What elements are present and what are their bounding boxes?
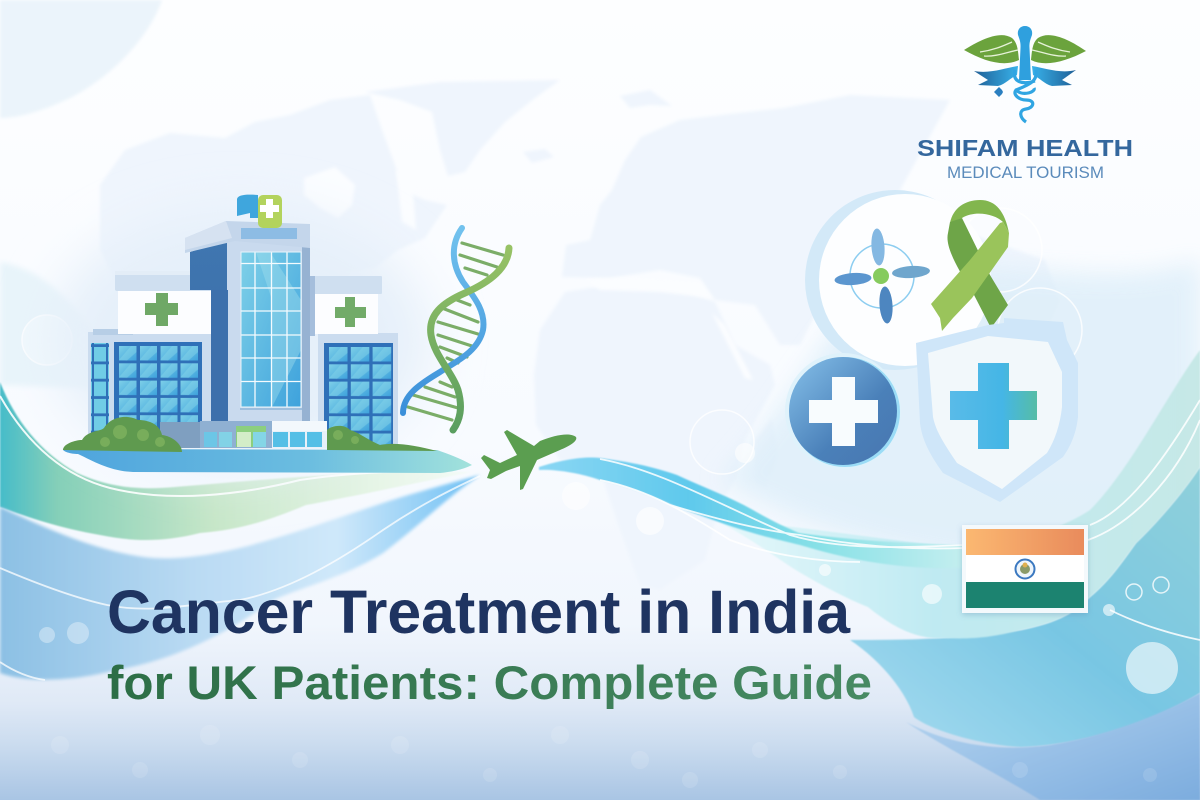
- top-left corner blob: [0, 0, 162, 118]
- white curve over green swoosh: [0, 396, 410, 496]
- saffron stripe: [966, 529, 1084, 555]
- circle emblem: [805, 190, 991, 370]
- map inland water and ocean highlights: [304, 167, 753, 380]
- small star: [994, 87, 1003, 97]
- left wing upper block: [115, 271, 212, 334]
- right wing upper block: [308, 276, 382, 336]
- right bokeh circles: [562, 443, 1178, 694]
- airplane: [481, 430, 576, 490]
- DNA helix: [403, 228, 509, 430]
- left green cross: [145, 293, 178, 326]
- decorative left circle: [22, 315, 72, 365]
- tower roof light edge: [185, 221, 232, 250]
- periwinkle wave bottom right: [906, 693, 1200, 800]
- white curves over blue swoosh: [0, 476, 480, 680]
- tower roof: [185, 221, 310, 253]
- crosshair hub: [873, 268, 889, 284]
- decorative swirl rings: [690, 208, 1169, 600]
- logo: [917, 26, 1133, 182]
- DNA rungs: [408, 243, 503, 420]
- left bushes: [63, 417, 182, 452]
- title line two: for UK Patients: Complete Guide: [107, 656, 872, 709]
- world map backdrop: [100, 80, 1060, 590]
- central tower: [190, 240, 310, 422]
- brand name: SHIFAM HEALTH: [917, 135, 1133, 161]
- pale left wave: [0, 262, 125, 390]
- hospital illustration: [50, 195, 472, 473]
- DNA green strand: [431, 248, 509, 430]
- awareness ribbon: [931, 200, 1009, 331]
- left bokeh dots: [39, 622, 89, 644]
- green swoosh: [0, 382, 472, 540]
- shield cross: [950, 363, 1037, 449]
- right blue wing: [1032, 66, 1076, 86]
- entrance lobby: [160, 421, 327, 448]
- tower glass: [241, 252, 301, 407]
- white curves on right wave: [600, 400, 1200, 640]
- left wing lower block: [88, 329, 213, 448]
- bottom bokeh dots: [51, 725, 1157, 788]
- platform: [63, 449, 472, 473]
- roof sign base: [241, 228, 297, 239]
- right green cross: [335, 297, 366, 327]
- title line one: Cancer Treatment in India: [107, 578, 851, 646]
- crosshair ring: [850, 244, 914, 308]
- shield: [916, 318, 1078, 502]
- right green wing: [1031, 35, 1086, 63]
- Ashoka chakra: [1016, 560, 1034, 578]
- deep blue wave lower right: [850, 467, 1200, 747]
- cyan wave band: [715, 350, 1200, 638]
- pale wave behind icons: [720, 260, 1200, 564]
- staff: [1018, 26, 1032, 80]
- serpent: [1014, 70, 1036, 122]
- soft glow behind hospital: [50, 210, 430, 470]
- medical plus badge: [785, 353, 901, 469]
- wing feather lines: [980, 42, 1070, 56]
- roof sign: [237, 195, 282, 228]
- blue swoosh: [0, 475, 480, 680]
- left green wing: [964, 35, 1019, 63]
- crosshair blades: [834, 228, 930, 324]
- right wing lower block: [318, 333, 398, 448]
- Indian flag: [962, 525, 1088, 613]
- sky-blue ribbon from plane: [539, 457, 964, 568]
- right bushes: [327, 426, 437, 451]
- green stripe: [966, 582, 1084, 608]
- left blue wing: [974, 66, 1018, 86]
- DNA blue strand: [403, 228, 483, 413]
- brand tagline: MEDICAL TOURISM: [947, 164, 1104, 182]
- logo mark: [964, 26, 1086, 122]
